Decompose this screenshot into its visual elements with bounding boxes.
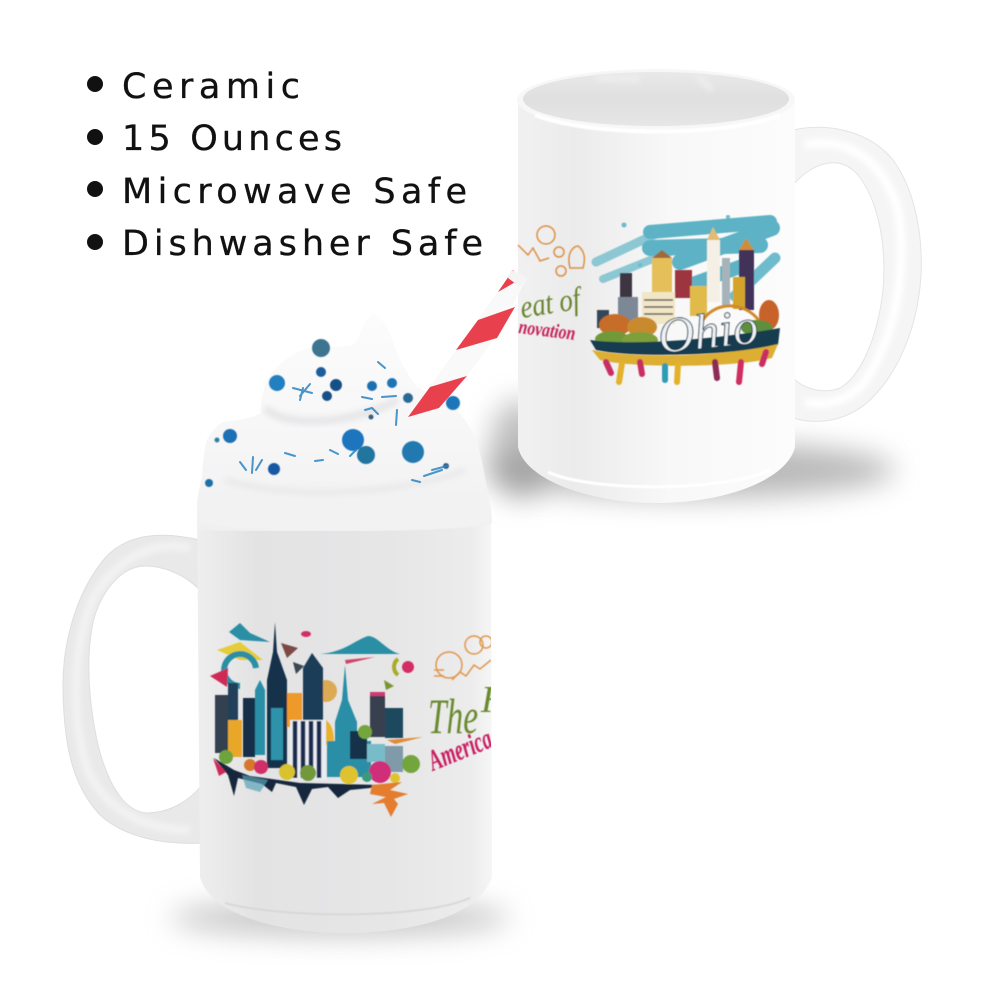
whipped cream (197, 313, 492, 531)
front mug body (197, 505, 492, 933)
front mug foot line (225, 898, 470, 914)
infographic canvas (62, 71, 922, 950)
feature list (87, 67, 483, 264)
bullet: Microwave Safe: Microwave Safe (122, 172, 467, 212)
rear mug artwork (517, 215, 780, 382)
orange icons (434, 636, 492, 680)
rear mug foot line (548, 470, 770, 487)
slogan line 2: novation (517, 316, 577, 345)
bullet: Dishwasher Safe: Dishwasher Safe (122, 224, 483, 264)
slogan line 1: The (428, 688, 478, 744)
rear mug rim (517, 69, 795, 132)
skyline (597, 227, 760, 328)
skyline (215, 622, 423, 780)
orange brush (370, 782, 408, 817)
bullet: 15 Ounces: 15 Ounces (122, 119, 342, 159)
front mug (63, 313, 511, 933)
ground drips (214, 758, 380, 805)
bullet: Ceramic: Ceramic (122, 67, 300, 107)
rear mug (517, 69, 921, 503)
shadow: front mug (170, 900, 510, 936)
rear mug handle (793, 127, 921, 421)
paint splash (596, 215, 775, 296)
front mug artwork (210, 622, 511, 817)
shadow: rear mug (485, 400, 895, 500)
slogan letter H: H (480, 679, 511, 721)
straw (408, 270, 527, 417)
clouds and decoration (210, 623, 414, 702)
slogan line 2: America (422, 722, 497, 778)
teal scribble (242, 775, 268, 792)
state name: Ohio (655, 298, 761, 364)
river base (590, 328, 780, 355)
slogan line 1: eat of (517, 279, 586, 325)
pink accent (213, 758, 226, 776)
trees (595, 300, 779, 348)
rear mug body (518, 100, 795, 503)
paint drips (606, 352, 766, 382)
trees (219, 725, 420, 784)
blue sprinkles (205, 339, 460, 487)
front mug handle (63, 535, 202, 843)
orange icons (518, 226, 584, 276)
